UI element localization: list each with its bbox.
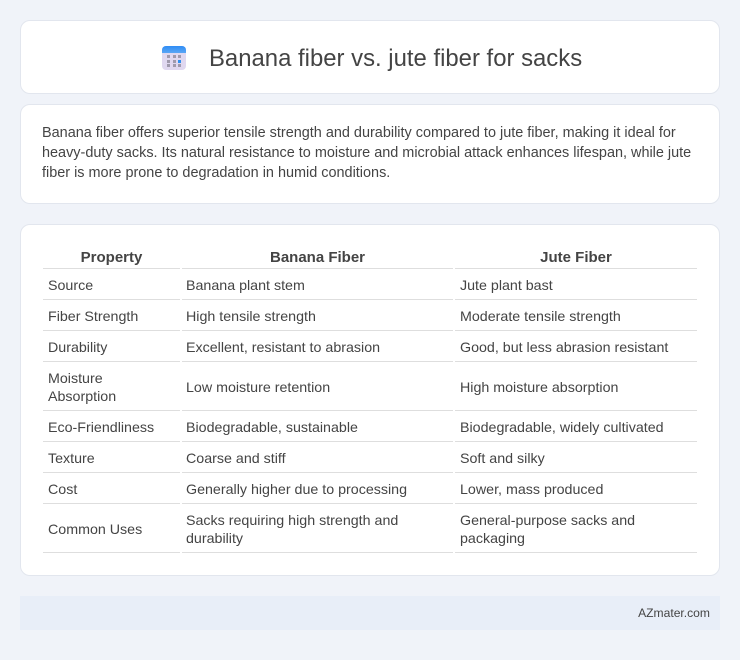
row: Moisture Absorption: Absorption <box>48 389 116 405</box>
text: Biodegradable, widely cultivated <box>460 420 664 436</box>
text: High tensile strength <box>186 309 316 325</box>
text: Generally higher due to processing <box>186 482 407 498</box>
row: Eco-Friendliness: Eco-Friendliness <box>48 420 154 436</box>
summary text: fiber is more prone to degradation in humid conditions. <box>42 165 390 181</box>
summary text: Banana fiber offers superior tensile strength and durability compared to jute fiber, making it ideal for <box>42 125 676 141</box>
text: Jute plant bast <box>460 278 553 294</box>
table header: Jute Fiber: Jute Fiber <box>540 249 612 266</box>
row: Common Uses: Common Uses <box>48 522 142 538</box>
text: packaging <box>460 531 525 547</box>
title: Banana fiber vs. jute fiber for sacks <box>209 45 582 72</box>
text: Moderate tensile strength <box>460 309 621 325</box>
panel: comparison table <box>20 224 720 576</box>
text: Coarse and stiff <box>186 451 286 467</box>
row: Moisture Absorption <box>48 371 116 405</box>
row: Durability: Durability <box>48 340 107 356</box>
text: High moisture absorption <box>460 380 618 396</box>
row: Fiber Strength: Fiber Strength <box>48 309 138 325</box>
summary text: heavy-duty sacks. Its natural resistance to moisture and microbial attack enhances lifespan, while jute <box>42 145 691 161</box>
panel: summary <box>20 104 720 204</box>
row: Cost: Cost <box>48 482 77 498</box>
row: Source: Source <box>48 278 93 294</box>
footer credit: AZmater.com <box>638 606 710 620</box>
text: durability <box>186 531 243 547</box>
text: Sacks requiring high strength and <box>186 513 398 529</box>
text: Lower, mass produced <box>460 482 603 498</box>
footer bar <box>20 596 720 630</box>
row: Moisture Absorption: Moisture <box>48 371 103 387</box>
table header: Banana Fiber: Banana Fiber <box>270 249 365 266</box>
text: General-purpose sacks and <box>460 513 635 529</box>
text: Low moisture retention <box>186 380 330 396</box>
text: Excellent, resistant to abrasion <box>186 340 380 356</box>
row: Texture: Texture <box>48 451 95 467</box>
icon: calendar <box>162 46 186 70</box>
text: Banana plant stem <box>186 278 305 294</box>
text: Soft and silky <box>460 451 545 467</box>
panel: title card <box>20 20 720 94</box>
table header: Property: Property <box>81 249 142 266</box>
text: Good, but less abrasion resistant <box>460 340 668 356</box>
summary text <box>42 125 691 181</box>
text: Biodegradable, sustainable <box>186 420 358 436</box>
